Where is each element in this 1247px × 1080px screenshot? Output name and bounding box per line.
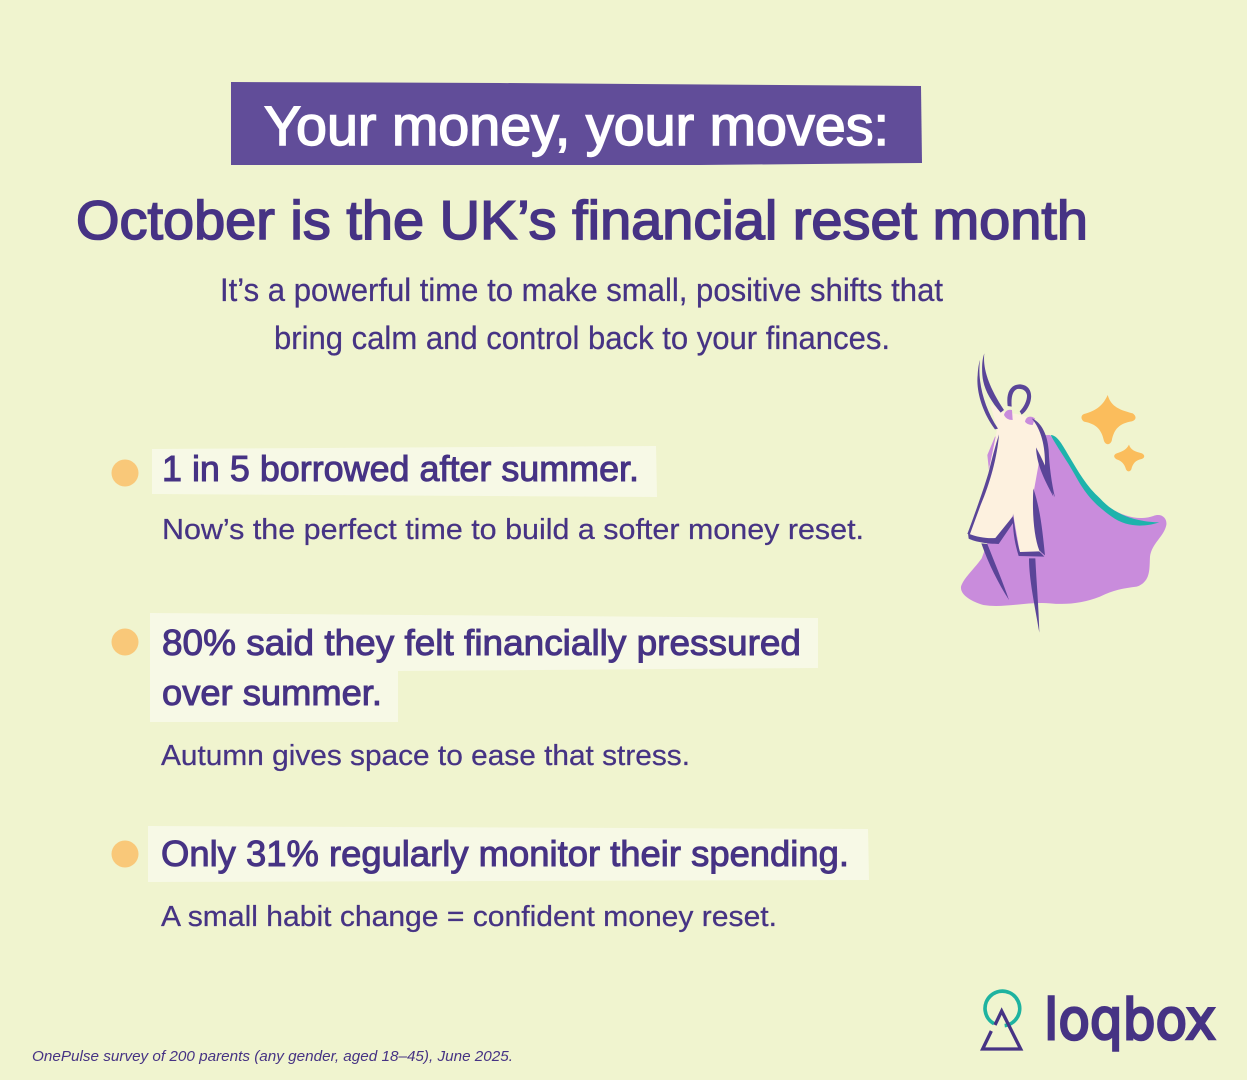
point 1 [112, 446, 864, 546]
supporting text: Autumn gives space to ease that stress. [161, 740, 690, 772]
source footnote: OnePulse survey of 200 parents (any gender, aged 18–45), June 2025. [32, 1048, 513, 1065]
cape [961, 435, 1166, 606]
illustration: superhero with cape and stars [961, 353, 1166, 633]
point 2 [112, 613, 818, 772]
highlighted statistic: over summer. [162, 672, 382, 713]
bullet dot [112, 628, 138, 656]
loqbox logo [983, 988, 1216, 1053]
logo wordmark: loqbox [1044, 988, 1216, 1053]
heading: October is the UK’s financial reset month [76, 189, 1088, 251]
highlighted statistic [148, 826, 869, 882]
supporting text: Now’s the perfect time to build a softer money reset. [162, 514, 864, 546]
intro text [220, 272, 943, 356]
title banner: Your money, your moves: [264, 94, 889, 157]
bullet dot [112, 460, 138, 486]
logo mark [983, 991, 1021, 1049]
highlighted statistic: 80% said they felt financially pressured [162, 622, 801, 663]
body [969, 403, 1048, 553]
point 3 [112, 826, 869, 933]
intro text: bring calm and control back to your finances. [274, 320, 890, 356]
bullet dot [112, 840, 138, 868]
cape lining [1051, 435, 1159, 526]
intro text: It’s a powerful time to make small, positive shifts that [220, 272, 943, 308]
shoulders [1004, 410, 1035, 425]
highlighted statistic: Only 31% regularly monitor their spending. [161, 833, 849, 874]
highlighted statistic [150, 613, 818, 722]
stars [1081, 395, 1144, 471]
highlighted statistic: 1 in 5 borrowed after summer. [162, 448, 639, 489]
supporting text: A small habit change = confident money reset. [161, 901, 777, 933]
figure outlines [967, 353, 1055, 633]
title banner [231, 82, 922, 165]
